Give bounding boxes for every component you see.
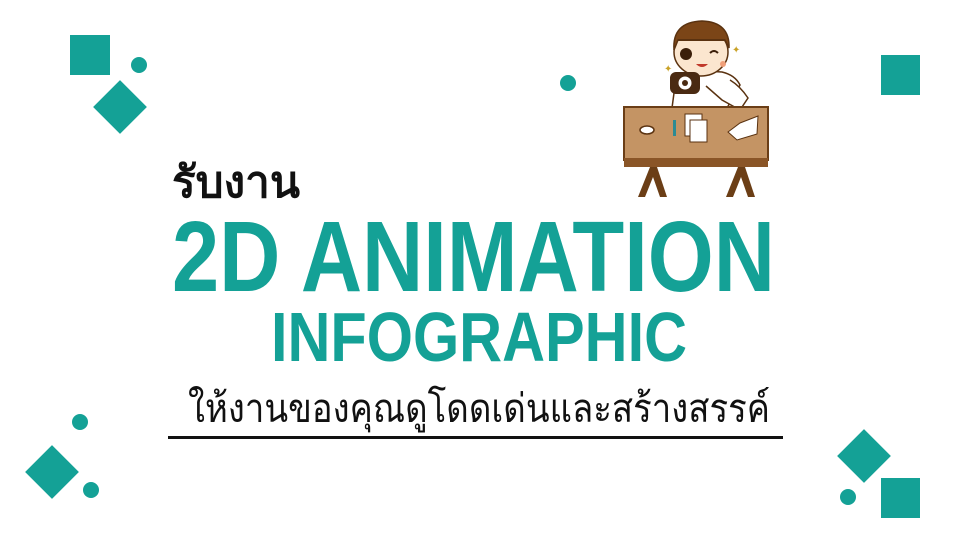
title: INFOGRAPHIC: INFOGRAPHIC: [271, 298, 687, 376]
underline: [168, 436, 783, 439]
decoration: bottom-right circle: [840, 489, 856, 505]
decoration: bottom-left circle: [83, 482, 99, 498]
subtitle: Thai tagline: ให้งานของคุณดูโดดเด่นและสร้างสรรค์: [188, 385, 770, 433]
decoration: top-left square: [70, 35, 110, 75]
character body and arms: [672, 72, 748, 110]
illustration: character at desk with camera: ✦: [664, 64, 672, 75]
illustration: character at desk with camera: [624, 21, 768, 197]
decoration: top-right square: [881, 55, 920, 95]
decoration: bottom-left diamond: [25, 445, 79, 499]
decoration: bottom-left circle top: [72, 414, 88, 430]
decoration: bottom-right diamond: [837, 429, 891, 483]
desk: [624, 107, 768, 197]
decoration: top-left diamond: [93, 80, 147, 134]
decoration: top-middle circle: [560, 75, 576, 91]
camera: [670, 72, 700, 94]
title: 2D ANIMATION: 2D ANIMATION: [172, 201, 775, 313]
decoration: top-left circle: [131, 57, 147, 73]
character head: [674, 21, 729, 76]
sparkles: ✦: [732, 45, 740, 56]
decoration: bottom-right square: [881, 478, 920, 518]
heading: รับงาน: รับงาน: [172, 158, 300, 207]
